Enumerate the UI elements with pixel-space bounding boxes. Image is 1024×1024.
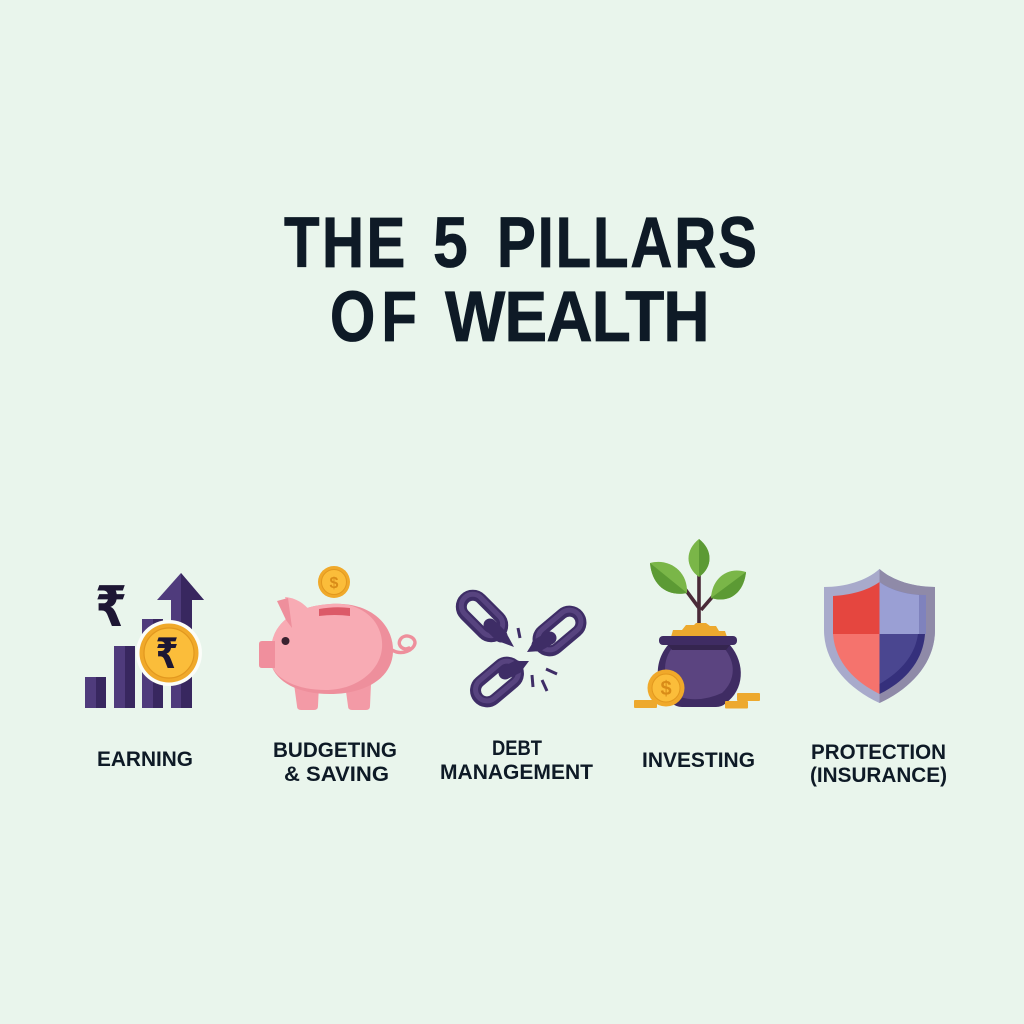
leaves xyxy=(650,539,746,600)
upper left link xyxy=(457,590,514,647)
label: PROTECTION xyxy=(811,741,946,764)
eye xyxy=(282,637,290,645)
shield rim xyxy=(824,569,935,703)
snout xyxy=(259,641,275,668)
icon: piggy bank xyxy=(259,566,415,710)
label xyxy=(273,739,397,786)
title xyxy=(284,202,757,357)
bar chart xyxy=(85,600,192,708)
icon: broken chain xyxy=(457,590,586,707)
label: INVESTING xyxy=(642,749,755,772)
navy quarter xyxy=(880,634,925,694)
falling coin xyxy=(318,566,350,598)
label: DEBT xyxy=(492,737,542,760)
dollar coin: $ xyxy=(660,678,672,700)
light blue quarter xyxy=(880,582,926,634)
break sparks xyxy=(518,628,557,691)
label: MANAGEMENT xyxy=(440,761,593,784)
label xyxy=(440,737,593,784)
label: & SAVING xyxy=(284,763,389,786)
arrow xyxy=(157,573,204,600)
body xyxy=(271,604,393,694)
falling coin: $ xyxy=(330,575,339,592)
lower link xyxy=(471,656,529,707)
pillar: debt management xyxy=(440,590,593,784)
title: OF xyxy=(330,276,417,356)
legs xyxy=(294,684,371,710)
red quarter xyxy=(833,582,880,634)
rupee symbol: ₹ xyxy=(95,575,127,640)
coin slot xyxy=(319,607,350,616)
label: EARNING xyxy=(97,748,193,771)
title: WEALTH xyxy=(445,278,710,357)
gold coin stacks xyxy=(634,693,760,708)
coral quarter xyxy=(833,634,880,694)
pillar: earning xyxy=(85,573,204,771)
dollar coin xyxy=(648,670,684,706)
pillar: investing xyxy=(634,539,760,772)
ear xyxy=(277,597,313,628)
pillar: budgeting and saving xyxy=(259,566,415,786)
label: BUDGETING xyxy=(273,739,397,762)
plant stem xyxy=(685,573,714,625)
title: 5 xyxy=(433,203,468,283)
icon: rising bars, arrow and rupee coin xyxy=(85,573,204,708)
label: (INSURANCE) xyxy=(810,764,947,787)
icon: plant in pot of gold xyxy=(634,539,760,708)
icon: shield xyxy=(824,569,935,703)
pillar: protection xyxy=(810,569,947,787)
rupee coin: ₹ xyxy=(156,629,178,678)
pot xyxy=(658,636,741,707)
upper right link xyxy=(527,605,586,656)
tail xyxy=(392,636,415,652)
gold coins in pot xyxy=(671,623,727,637)
title: THE xyxy=(284,202,405,282)
title: PILLARS xyxy=(497,202,757,282)
label xyxy=(810,741,947,787)
